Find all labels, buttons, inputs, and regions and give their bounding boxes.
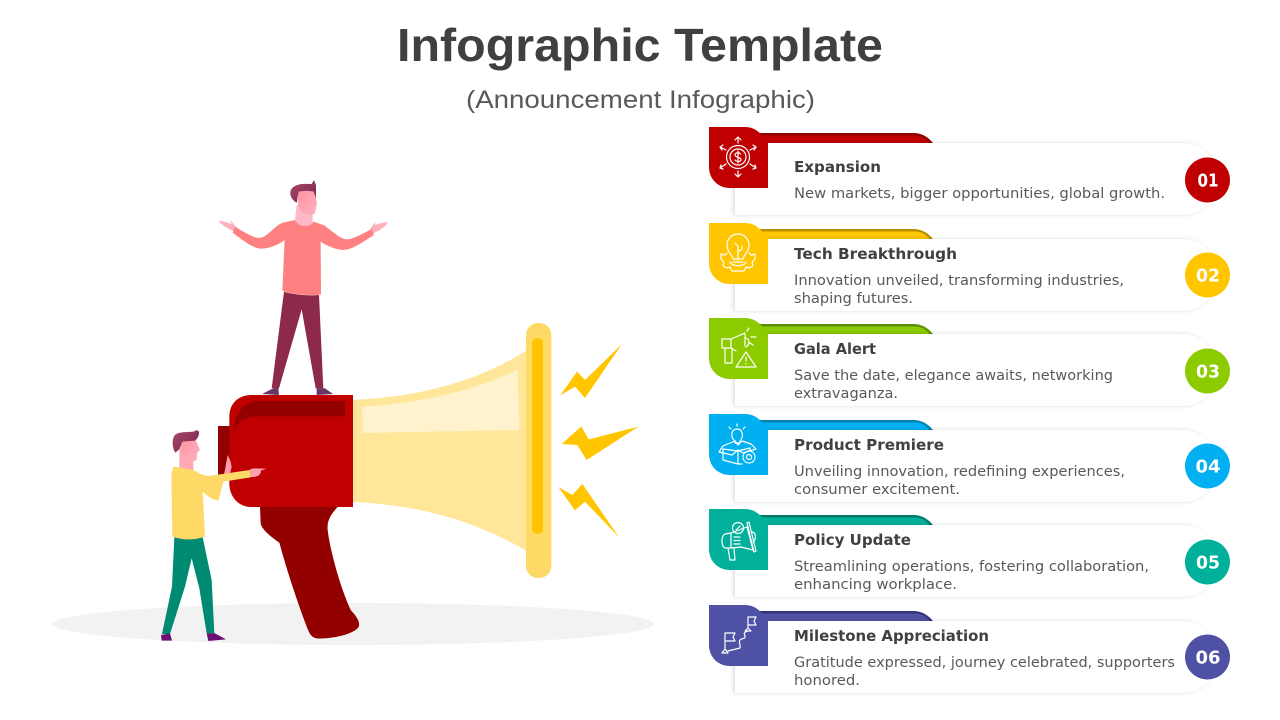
description: Save the date, elegance awaits, networking [794,368,1113,384]
heading: Milestone Appreciation [794,627,989,645]
subtitle: (Announcement Infographic) [466,86,815,114]
title: Infographic Template [397,19,883,71]
icon: policy megaphone [722,522,756,560]
number badge: 01 [1198,170,1218,192]
item 04: Product Premiere [709,414,1230,502]
item 05: Policy Update [709,509,1230,597]
icon tile [709,605,768,666]
description: honored. [794,673,860,689]
description [794,273,1124,307]
icon: money expansion [720,137,756,177]
card [735,239,1218,311]
item 01: Expansion [709,127,1230,215]
item 03: Gala Alert [709,318,1230,406]
icon tile [709,318,768,379]
megaphone illustration [218,323,638,638]
description [794,368,1113,402]
icon tile [709,127,768,188]
description: Gratitude expressed, journey celebrated, supporters [794,655,1175,671]
description [794,655,1175,689]
icon tile [709,414,768,475]
item 02: Tech Breakthrough [709,223,1230,311]
heading: Tech Breakthrough [794,245,957,263]
number badge: 04 [1196,456,1220,478]
person pushing megaphone [161,430,267,641]
megaphone horn [353,323,551,578]
heading: Expansion [794,158,881,176]
description [794,559,1149,593]
tab [760,229,933,246]
heading: Gala Alert [794,340,876,358]
description: Streamlining operations, fostering collaboration, [794,559,1149,575]
megaphone body and handle [218,395,359,638]
number badge [1185,634,1230,680]
description: New markets, bigger opportunities, global growth. [794,186,1165,202]
description: extravaganza. [794,386,898,402]
description: shaping futures. [794,291,913,307]
number badge [1185,252,1230,298]
card [735,621,1218,693]
number badge [1185,158,1230,202]
description: enhancing workplace. [794,577,957,593]
number badge: 02 [1196,266,1220,286]
icon: product box [719,424,756,464]
ground shadow [52,603,654,645]
number badge: 06 [1196,648,1220,668]
tab [760,420,933,437]
sound bolts [558,344,638,538]
person standing on megaphone [218,180,388,395]
card [735,143,1218,215]
heading: Product Premiere [794,436,944,454]
description: Innovation unveiled, transforming industries, [794,273,1124,289]
item 06: Milestone Appreciation [709,605,1230,693]
tab [760,515,933,532]
description: Unveiling innovation, redefining experiences, [794,464,1125,480]
icon tile [709,509,768,570]
tab [760,324,933,341]
number badge [1185,444,1230,488]
card [735,525,1218,597]
tab [760,133,933,150]
icon: megaphone alert [722,328,756,367]
icon: milestone flags [722,617,756,653]
description: consumer excitement. [794,482,960,498]
tab [760,611,933,628]
description [794,464,1125,498]
number badge: 03 [1196,362,1220,382]
card [735,430,1218,502]
number badge [1185,540,1230,584]
number badge [1185,348,1230,394]
card [735,334,1218,406]
icon tile [709,223,768,284]
heading: Policy Update [794,531,911,549]
number badge: 05 [1196,552,1220,574]
icon: bulb and gear [721,234,755,271]
